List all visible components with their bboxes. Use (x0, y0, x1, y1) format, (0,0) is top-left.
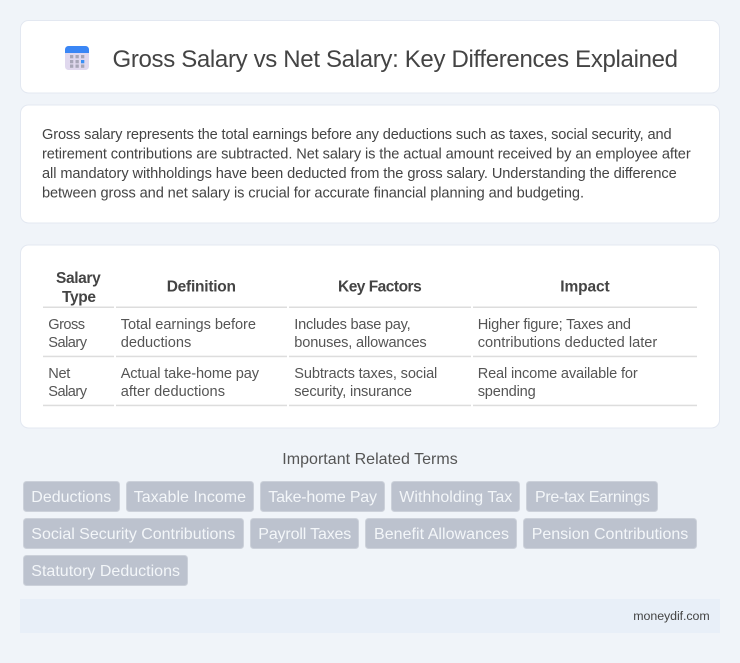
table header: Impact (560, 279, 610, 296)
panel: comparison table (20, 245, 720, 428)
table row: net salary: after deductions (121, 384, 225, 400)
table row: net salary: spending (478, 384, 536, 400)
related term tags: Statutory Deductions (31, 563, 180, 580)
table row: gross salary: contributions deducted later (478, 335, 657, 351)
related term tags: Benefit Allowances (374, 526, 509, 543)
related term tags: Pre-tax Earnings (535, 489, 650, 506)
table row: gross salary: deductions (121, 335, 191, 351)
footer: moneydif.com (633, 609, 710, 623)
title: Gross Salary vs Net Salary: Key Differences Explained (112, 46, 678, 73)
related term tags: Take-home Pay (268, 489, 377, 506)
table header: Key Factors (338, 279, 422, 296)
related term tags: Pension Contributions (532, 526, 688, 543)
table row: net salary: Actual take-home pay (121, 366, 260, 382)
table row: net salary: Subtracts taxes, social (294, 366, 437, 382)
heading: important related terms: Important Related Terms (282, 451, 458, 468)
table row: gross salary: Total earnings before (121, 317, 256, 333)
related term tags: Social Security Contributions (31, 526, 235, 543)
table row: gross salary: bonuses, allowances (294, 335, 427, 351)
table row: gross salary: Gross (48, 317, 85, 333)
table row: gross salary: Salary (48, 335, 88, 351)
panel: introduction text: between gross and net salary is crucial for accurate financial planning and budgeting. (42, 186, 584, 202)
table header: Type (62, 289, 96, 306)
table row: net salary (48, 366, 638, 400)
table row: gross salary: Higher figure; Taxes and (478, 317, 631, 333)
related term tags: Withholding Tax (399, 489, 512, 506)
panel: introduction text (20, 105, 720, 223)
table row: gross salary: Includes base pay, (294, 317, 411, 333)
panel: introduction text: all mandatory withholdings have been deducted from the gross salary. Understanding the difference (42, 166, 677, 182)
related term tags: Taxable Income (134, 489, 246, 506)
related term tags: Deductions (31, 489, 111, 506)
table header (56, 270, 610, 306)
table row: net salary: Real income available for (478, 366, 638, 382)
footer (20, 599, 720, 633)
related term tags (24, 482, 696, 586)
panel: introduction text: retirement contributions are subtracted. Net salary is the actual amount received by an employee after (42, 146, 691, 162)
icon: calendar (65, 46, 89, 70)
table row: net salary: Net (48, 366, 70, 382)
table header: Definition (167, 279, 236, 296)
table header: Salary (56, 270, 101, 287)
related term tags: Payroll Taxes (258, 526, 351, 543)
table row: gross salary (48, 317, 657, 351)
panel: introduction text: Gross salary represents the total earnings before any deductions such as taxes, social security, and (42, 127, 672, 143)
table row: net salary: Salary (48, 384, 88, 400)
panel: header (20, 20, 720, 93)
table row: net salary: security, insurance (294, 384, 412, 400)
